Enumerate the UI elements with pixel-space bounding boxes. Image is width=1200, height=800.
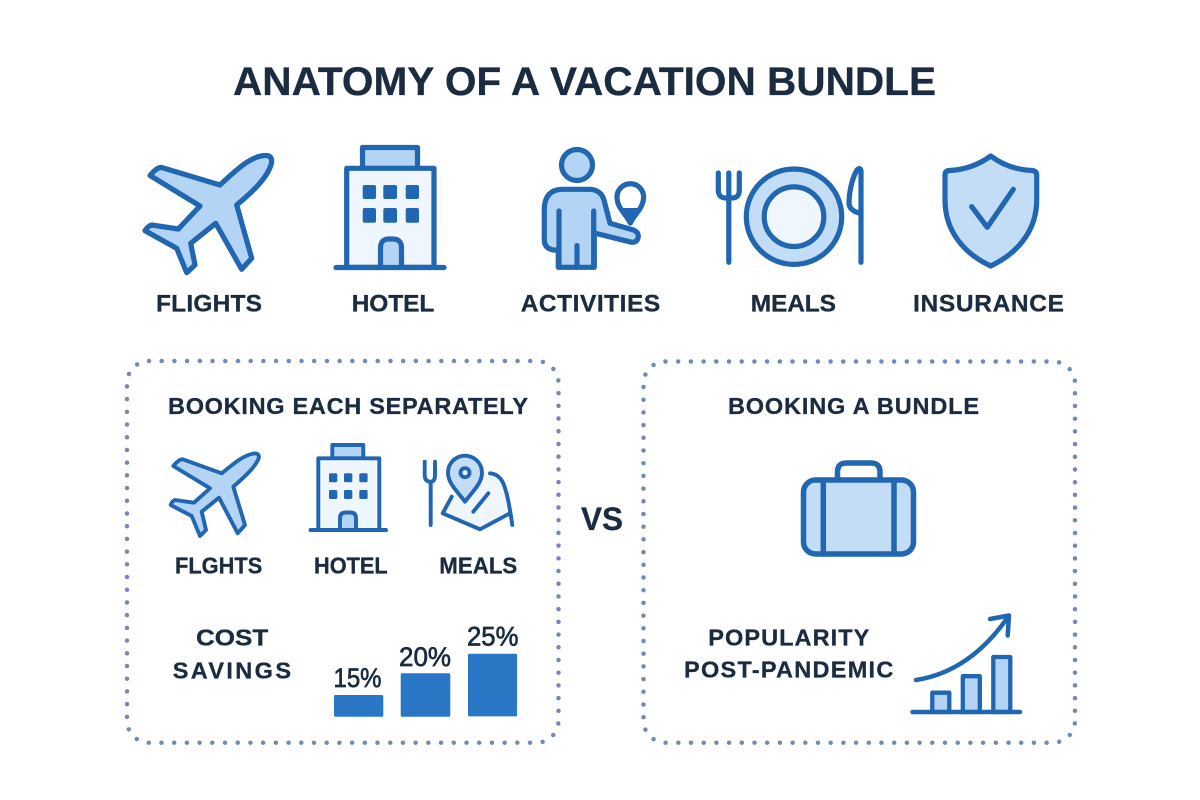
panel: booking each separately [127, 361, 558, 743]
icon: plane [145, 155, 272, 273]
label: popularity post-pandemic: POPULARITY [708, 625, 870, 651]
label: meals: MEALS [439, 552, 517, 578]
icon: person with location pin [544, 150, 644, 267]
heading: booking each separately: BOOKING EACH SEPARATELY [168, 393, 528, 419]
icon: shield with check [945, 156, 1037, 266]
icon: fork and map pin [425, 456, 512, 529]
panel: booking each separately: SAVINGS [173, 658, 291, 684]
icon: suitcase [804, 463, 914, 554]
title: ANATOMY OF A VACATION BUNDLE [233, 60, 936, 104]
label: hotel: HOTEL [352, 291, 434, 318]
bar chart: cost savings: 20% [399, 642, 451, 672]
icon: small hotel [310, 445, 386, 530]
panel: booking a bundle [644, 362, 1075, 743]
bar chart: cost savings: 25% [467, 622, 518, 652]
label: hotel: HOTEL [314, 552, 388, 578]
label: activities: ACTIVITIES [521, 291, 660, 318]
label: flights: FLIGHTS [156, 291, 262, 318]
top row: bundle components [145, 148, 1064, 318]
bar chart: cost savings: 15% [334, 663, 382, 693]
icon: rising bar chart with arrow [912, 616, 1020, 712]
bar chart: cost savings [334, 622, 518, 717]
icon: hotel [336, 148, 444, 268]
heading: booking a bundle: BOOKING A BUNDLE [728, 393, 979, 419]
label: meals: MEALS [751, 291, 836, 318]
label: insurance: INSURANCE [913, 291, 1064, 318]
label: cost savings: COST [196, 625, 269, 651]
label: flghts: FLGHTS [175, 552, 262, 578]
icon: fork, plate and knife [718, 169, 861, 264]
label: vs: VS [581, 501, 623, 537]
icon: small plane [171, 453, 259, 536]
panel: booking a bundle: POST-PANDEMIC [684, 657, 893, 683]
